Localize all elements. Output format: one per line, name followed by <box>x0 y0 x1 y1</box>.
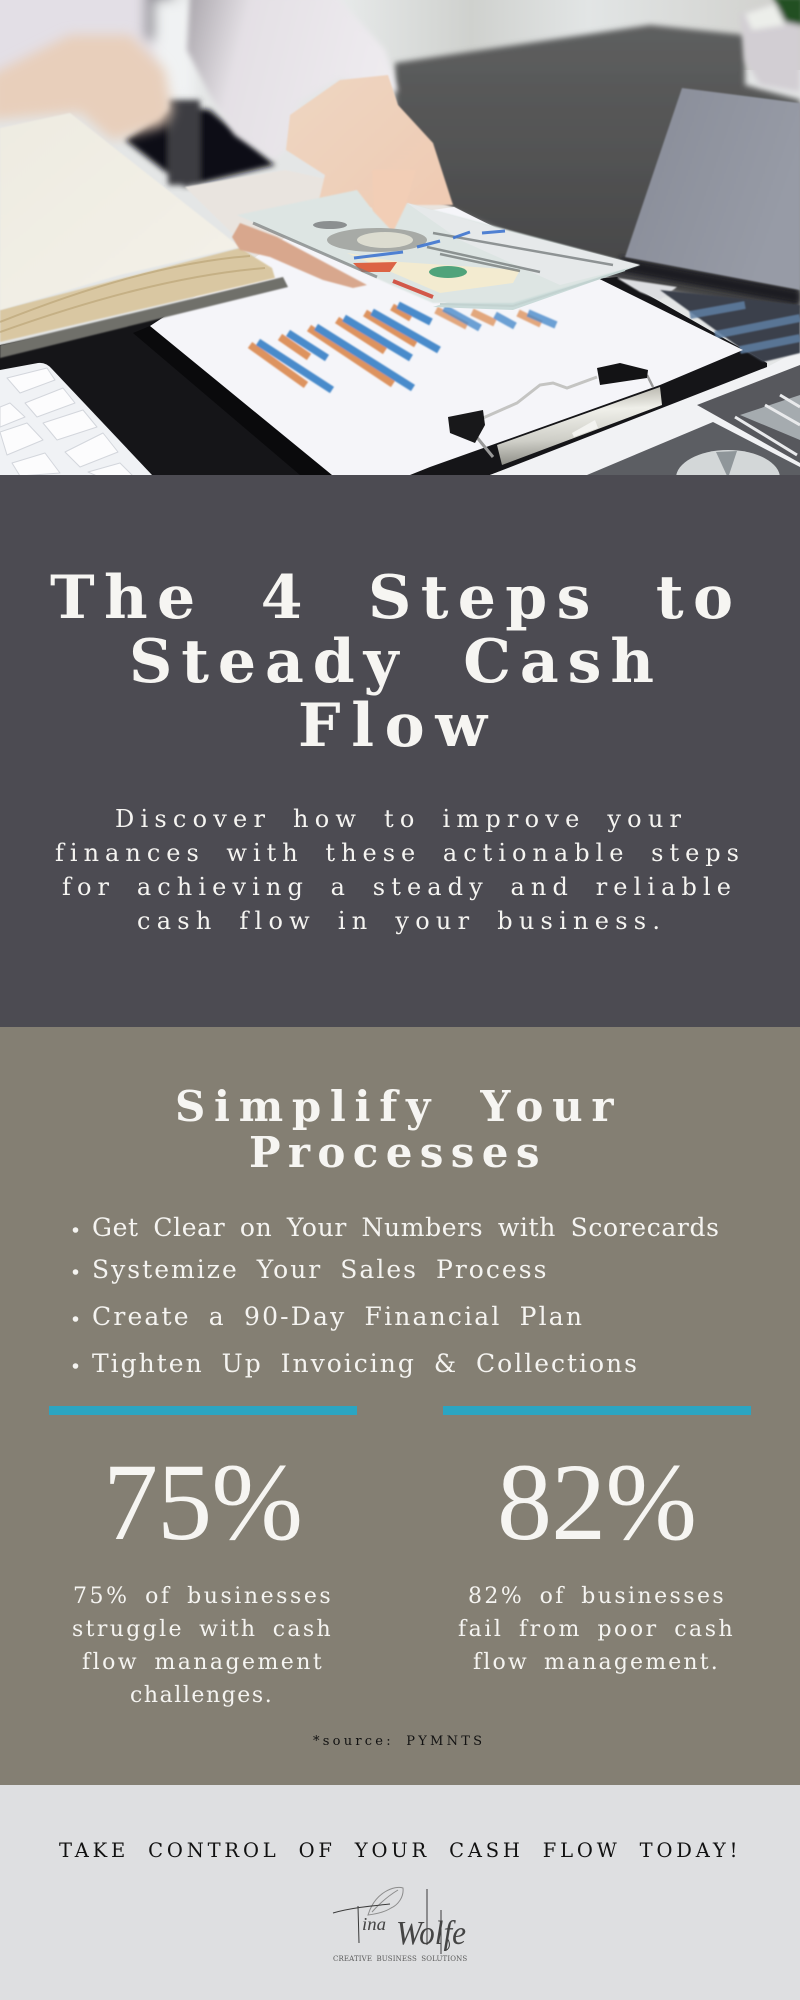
stat: 75%: challenges. <box>130 1683 272 1708</box>
black clipboard and table <box>0 277 767 475</box>
stat: 75% <box>49 1406 357 1708</box>
checklist: Get Clear on Your Numbers with Scorecards <box>92 1213 719 1242</box>
intro text: cash flow in your business. <box>137 907 664 935</box>
checklist <box>73 1213 719 1378</box>
hero photo: hand passing cash over a financial report <box>0 0 800 506</box>
panel: intro <box>0 475 800 1027</box>
checklist: Tighten Up Invoicing & Collections <box>92 1349 638 1378</box>
laptop <box>620 257 800 305</box>
title: Steady Cash <box>129 627 661 697</box>
potted plant <box>740 0 800 92</box>
intro text: for achieving a steady and reliable <box>62 873 735 901</box>
right lower documents <box>490 277 800 475</box>
section heading: Processes <box>249 1128 544 1177</box>
intro text: finances with these actionable steps <box>55 839 743 867</box>
notebook <box>0 113 288 358</box>
logo: Tina Wolfe signature: ina <box>362 1914 386 1934</box>
intro text <box>55 805 743 935</box>
logo: Tina Wolfe signature: Wolfe <box>396 1915 466 1952</box>
title <box>50 563 740 761</box>
clipboard clip <box>448 363 662 465</box>
bar chart on report <box>250 305 556 390</box>
stat: 75%: flow management <box>82 1650 322 1675</box>
stat: 75%: 75% <box>103 1441 303 1563</box>
logo: Tina Wolfe signature: CREATIVE BUSINESS SOLUTIONS <box>333 1955 468 1963</box>
report sheet <box>150 207 743 475</box>
sleeve <box>187 0 398 160</box>
stat: 75%: 75% of businesses <box>73 1584 331 1609</box>
paper behind hand <box>185 176 468 214</box>
stat: 82%: 82% <box>497 1441 697 1563</box>
stat: 82%: fail from poor cash <box>458 1617 733 1642</box>
title: Flow <box>298 691 494 761</box>
source note: *source: PYMNTS <box>313 1734 484 1749</box>
checklist: Systemize Your Sales Process <box>92 1255 547 1284</box>
panel: simplify your processes <box>0 1027 800 1785</box>
blurred left hand <box>0 35 172 140</box>
stat: 82% <box>443 1406 751 1675</box>
stat: 82%: 82% of businesses <box>468 1584 724 1609</box>
section heading <box>175 1082 618 1177</box>
call to action: TAKE CONTROL OF YOUR CASH FLOW TODAY! <box>59 1839 740 1862</box>
logo: Tina Wolfe signature <box>333 1887 468 1963</box>
title: The 4 Steps to <box>50 563 740 633</box>
section heading: Simplify Your <box>175 1082 618 1131</box>
blurred wall and desk background <box>395 25 800 320</box>
sweater and dark gap <box>134 0 193 96</box>
intro text: Discover how to improve your <box>115 805 685 833</box>
keyboard <box>0 363 152 476</box>
stat: 82%: flow management. <box>473 1650 718 1675</box>
panel: footer call to action <box>0 1785 800 2000</box>
checklist: Create a 90-Day Financial Plan <box>92 1302 583 1331</box>
stat: 75%: struggle with cash <box>72 1617 331 1642</box>
hand with fingers <box>232 75 453 288</box>
bank notes <box>237 190 640 310</box>
icon: feather <box>368 1887 403 1915</box>
